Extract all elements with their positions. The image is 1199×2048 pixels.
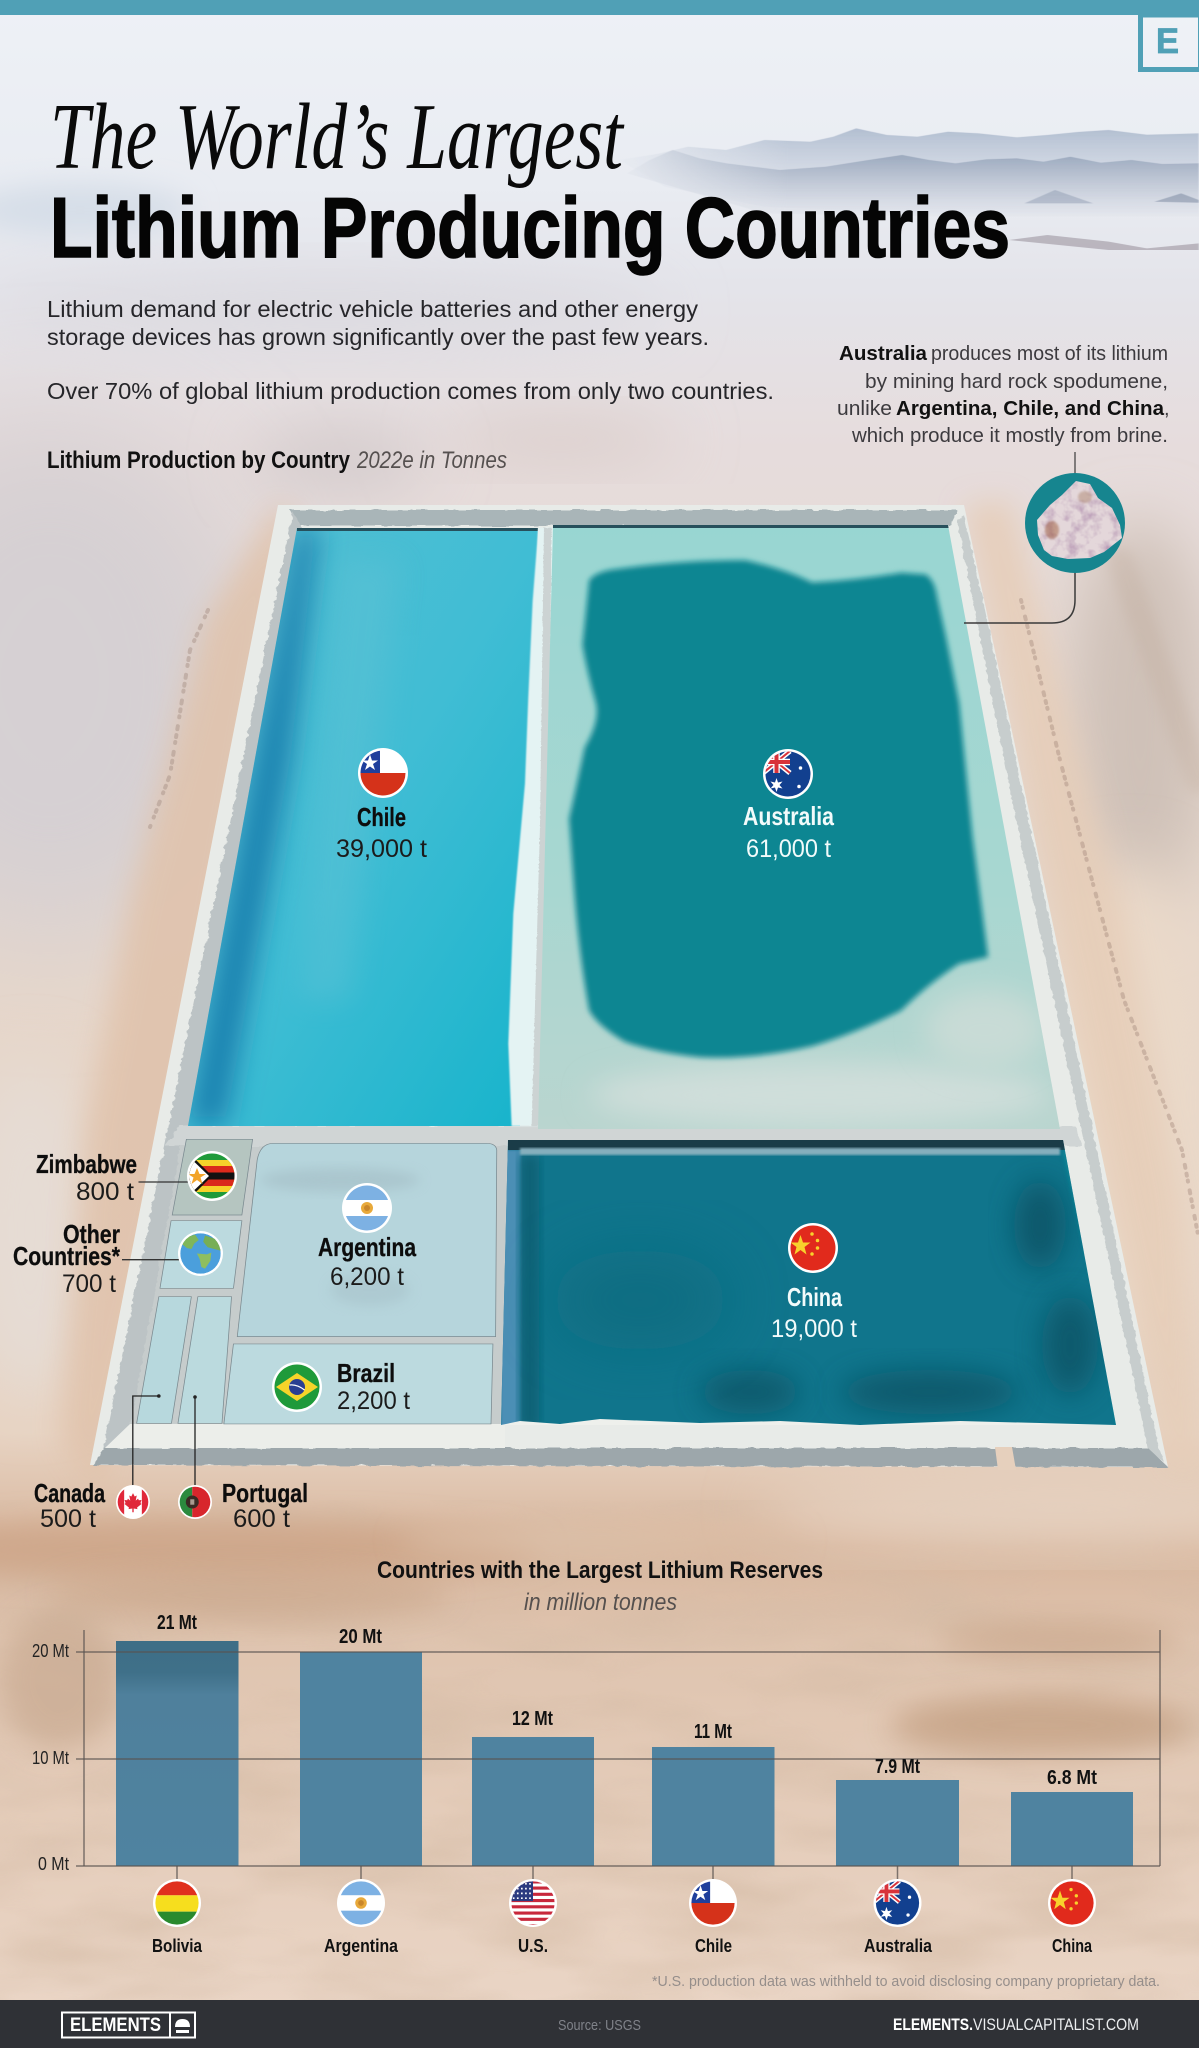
flag: Argentina [337, 1879, 385, 1927]
pond: other countries [160, 1221, 242, 1288]
label: Other Countries: Countries* [13, 1241, 121, 1271]
label: Argentina: 6,200 t [330, 1263, 404, 1291]
label: Chile: Chile [357, 802, 406, 832]
label: Canada [34, 1394, 161, 1533]
label: Portugal [178, 1395, 308, 1533]
title: Lithium Producing Countries [50, 181, 1010, 276]
pond: Portugal [178, 1297, 232, 1423]
country labels: Argentina [324, 1936, 399, 1956]
value labels: 12 Mt [512, 1708, 553, 1730]
production chart heading: Lithium Production by Country [47, 447, 351, 474]
label: Brazil: 2,200 t [337, 1387, 410, 1415]
divider with salt crust between Chile and Australia [508, 528, 553, 1126]
bar: U.S. [472, 1737, 594, 1866]
value labels [157, 1612, 1097, 1789]
pond: Chile [180, 520, 550, 1130]
label: Chile [336, 748, 427, 863]
country labels: Bolivia [152, 1936, 203, 1956]
chart axes [76, 1630, 1160, 1880]
sand tracks beside the ponds [150, 560, 1199, 1240]
pond: Australia [530, 520, 1070, 1135]
Elements logo badge: E [1156, 22, 1179, 61]
bar: Chile [652, 1747, 774, 1866]
Australia callout text: Australia [839, 343, 928, 365]
flag: China [1048, 1879, 1096, 1927]
axis labels: 0 Mt [38, 1854, 69, 1874]
bar: Argentina [300, 1652, 422, 1866]
label: Australia: 61,000 t [746, 835, 831, 863]
bar: China [1011, 1792, 1133, 1866]
value labels: 6.8 Mt [1047, 1767, 1097, 1789]
Australia callout text: produces most of its lithium [931, 343, 1168, 365]
label: China [771, 1223, 857, 1343]
icon: spodumene rock [1037, 481, 1122, 559]
value labels: 21 Mt [157, 1612, 197, 1634]
footer bar [0, 2000, 1199, 2048]
Australia callout text: by mining hard rock spodumene, [865, 371, 1168, 393]
Australia callout text: unlike [837, 398, 892, 420]
label: Australia: Australia [743, 801, 834, 831]
reserves chart heading: in million tonnes [524, 1589, 677, 1616]
label: Zimbabwe [36, 1149, 237, 1206]
label: Portugal: Portugal [222, 1478, 308, 1508]
website: VISUALCAPITALIST.COM [973, 2015, 1139, 2034]
label: Other Countries [13, 1219, 223, 1298]
source: Source: USGS [558, 2017, 641, 2034]
reserves chart heading [377, 1557, 823, 1616]
pond: Canada [137, 1297, 191, 1423]
label: Chile: 39,000 t [336, 835, 427, 863]
title [50, 85, 1010, 276]
bar: Bolivia [116, 1641, 238, 1866]
pond: Zimbabwe [172, 1139, 253, 1215]
intro text: storage devices has grown significantly over the past few years. [47, 324, 709, 350]
bar chart: lithium reserves [32, 1612, 1160, 1956]
flag: Australia [874, 1879, 922, 1927]
lower-left ponds [137, 1139, 497, 1424]
flag: Bolivia [153, 1879, 201, 1928]
flag: United States [509, 1879, 557, 1927]
intro text [47, 296, 774, 404]
top accent bar [0, 0, 1199, 15]
label: Canada: 500 t [40, 1505, 96, 1533]
footer logo [62, 2012, 195, 2038]
label: Argentina [318, 1183, 416, 1291]
website: ELEMENTS. [893, 2015, 973, 2034]
label: Brazil: Brazil [337, 1358, 395, 1388]
axis labels [32, 1641, 69, 1874]
Australia callout text [837, 343, 1170, 447]
intro text: Over 70% of global lithium production comes from only two countries. [47, 378, 774, 404]
footnote: *U.S. production data was withheld to avoid disclosing company proprietary data. [652, 1973, 1160, 1990]
dark water area in Australia pond [569, 560, 988, 1058]
footer logo: ELEMENTS [70, 2015, 161, 2036]
value labels: 7.9 Mt [875, 1756, 920, 1778]
label: Other Countries: Other [63, 1219, 120, 1249]
label: Australia [743, 749, 834, 863]
mineral callout [964, 452, 1125, 623]
value labels: 11 Mt [694, 1721, 732, 1743]
value labels: 20 Mt [339, 1626, 382, 1648]
country labels: China [1052, 1936, 1093, 1956]
label: Brazil [272, 1358, 410, 1415]
label: Other Countries: 700 t [62, 1270, 116, 1298]
Australia callout text: which produce it mostly from brine. [851, 425, 1168, 447]
country labels: U.S. [518, 1936, 548, 1956]
label: China: 19,000 t [771, 1315, 857, 1343]
country labels: Chile [695, 1936, 732, 1956]
pond: Argentina [237, 1143, 497, 1337]
reserves chart heading: Countries with the Largest Lithium Reserves [377, 1557, 823, 1584]
country labels: Australia [864, 1936, 933, 1956]
pond complex walls [90, 505, 1168, 1470]
Argentina pond shading [260, 1168, 420, 1306]
label: China: China [787, 1282, 842, 1312]
Australia callout text: Argentina, Chile, and China [896, 398, 1165, 420]
flag: Chile [689, 1879, 737, 1927]
axis labels: 10 Mt [32, 1748, 69, 1768]
label: Portugal: 600 t [233, 1505, 290, 1533]
label: Zimbabwe: 800 t [76, 1178, 134, 1206]
website [893, 2015, 1139, 2034]
pond: China [495, 1135, 1125, 1432]
Elements logo badge [1140, 15, 1199, 70]
mountains in the distance [619, 128, 1199, 250]
pond: Brazil [224, 1344, 493, 1424]
country labels [152, 1936, 1093, 1956]
title: The World’s Largest [50, 85, 624, 189]
label: Canada: Canada [34, 1478, 105, 1508]
production chart heading: 2022e in Tonnes [356, 447, 507, 474]
label: Zimbabwe: Zimbabwe [36, 1149, 137, 1179]
axis labels: 20 Mt [32, 1641, 69, 1661]
intro text: Lithium demand for electric vehicle batteries and other energy [47, 296, 699, 322]
bar: Australia [836, 1780, 959, 1866]
label: Argentina: Argentina [318, 1232, 416, 1262]
Australia callout text: , [1164, 398, 1170, 420]
